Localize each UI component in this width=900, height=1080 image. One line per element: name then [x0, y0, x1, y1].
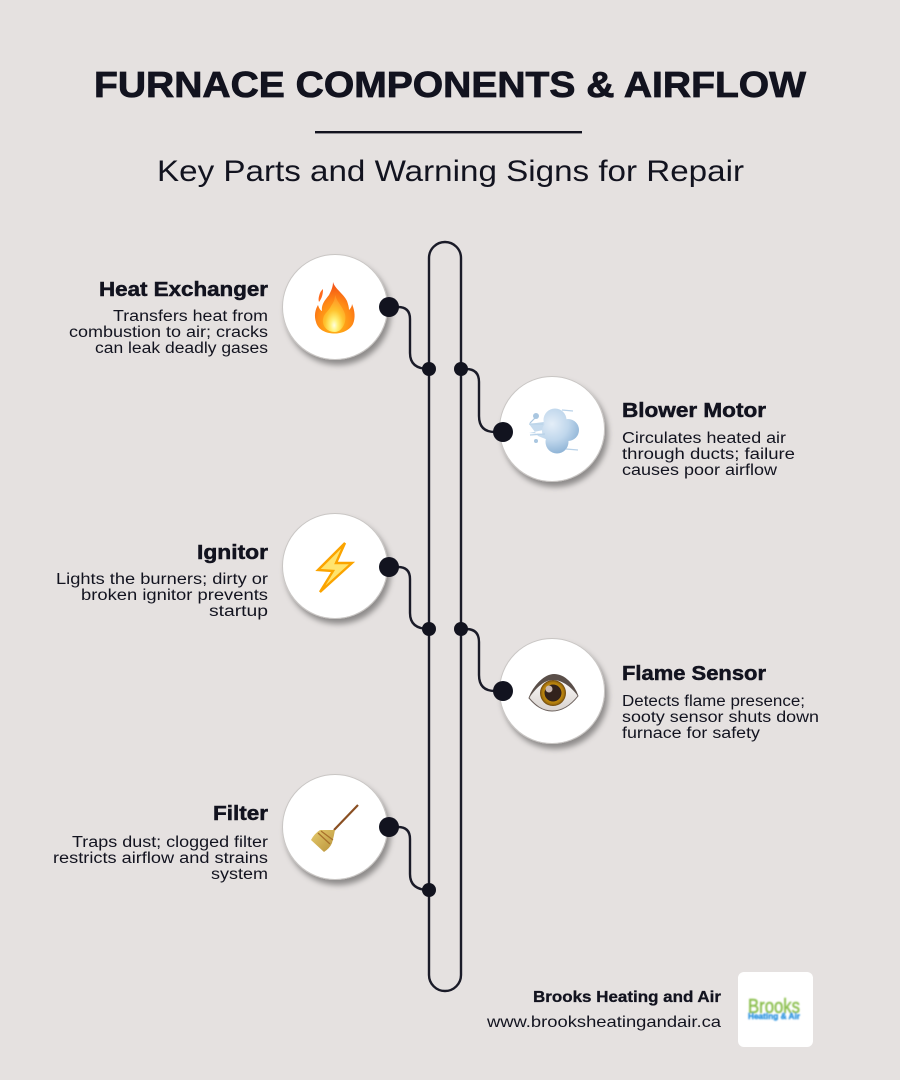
dot [379, 817, 399, 837]
flame sensor heading: Flame Sensor [622, 663, 766, 685]
track junction nodes [422, 362, 468, 897]
icon: lightning bolt [318, 543, 352, 592]
heat exchanger description: combustion to air; cracks [69, 324, 268, 341]
filter description [53, 834, 268, 883]
blower motor description [622, 430, 795, 479]
title: FURNACE COMPONENTS & AIRFLOW [94, 64, 806, 105]
flame sensor description: Detects flame presence; [622, 693, 805, 710]
heat exchanger description: can leak deadly gases [95, 340, 268, 357]
panel: heat exchanger [69, 254, 399, 360]
connector: flame sensor [461, 629, 503, 691]
footer logo: Brooks [748, 996, 800, 1018]
connector: heat exchanger [389, 307, 429, 369]
heat exchanger description: Transfers heat from [113, 308, 268, 325]
dot [379, 557, 399, 577]
panel: blower motor [493, 376, 795, 482]
blower motor description: through ducts; failure [622, 446, 795, 463]
heat exchanger heading: Heat Exchanger [99, 279, 268, 301]
panel: filter [53, 774, 399, 883]
connector: blower motor [461, 369, 503, 432]
blower motor description: Circulates heated air [622, 430, 786, 447]
ignitor description: startup [209, 603, 268, 620]
panel: flame sensor [493, 638, 819, 744]
icon: fire [315, 282, 355, 334]
dot [493, 422, 513, 442]
icon: eye [529, 674, 578, 711]
footer: company name: Brooks Heating and Air [533, 989, 721, 1006]
footer: website: www.brooksheatingandair.ca [486, 1014, 721, 1031]
icon: broom [311, 805, 358, 852]
blower motor icon circle [500, 376, 604, 482]
connector: ignitor [389, 567, 429, 629]
ignitor description: broken ignitor prevents [81, 587, 268, 604]
blower motor description: causes poor airflow [622, 462, 778, 479]
ignitor description [56, 571, 268, 620]
central duct track [429, 242, 461, 991]
heat exchanger icon circle [282, 254, 388, 360]
flame sensor icon circle [500, 638, 604, 744]
connector: filter [389, 827, 429, 890]
footer logo [738, 972, 813, 1047]
ignitor description: Lights the burners; dirty or [56, 571, 268, 588]
flame sensor description: sooty sensor shuts down [622, 709, 819, 726]
ignitor icon circle [282, 514, 388, 618]
heat exchanger description [69, 308, 268, 357]
filter icon circle [282, 774, 388, 880]
flame sensor description [622, 693, 819, 742]
filter description: system [211, 866, 268, 883]
ignitor heading: Ignitor [197, 542, 268, 564]
dot [379, 297, 399, 317]
footer logo: Heating & Air [748, 1012, 800, 1021]
filter heading: Filter [213, 803, 268, 825]
flame sensor description: furnace for safety [622, 725, 760, 742]
filter description: restricts airflow and strains [53, 850, 268, 867]
dot [493, 681, 513, 701]
filter description: Traps dust; clogged filter [72, 834, 268, 851]
panel: ignitor [56, 514, 399, 620]
subtitle: Key Parts and Warning Signs for Repair [157, 155, 744, 188]
icon: wind puff [529, 408, 579, 454]
blower motor heading: Blower Motor [622, 400, 766, 422]
